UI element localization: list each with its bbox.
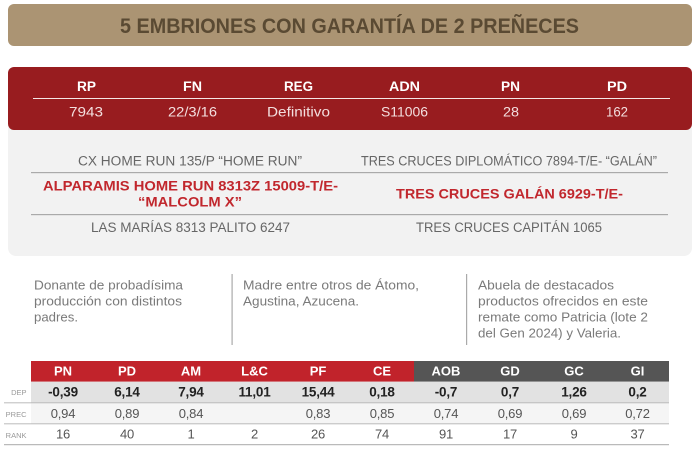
column headers: PN — [54, 364, 72, 378]
column headers — [54, 364, 644, 378]
note: grandmother — [478, 278, 648, 341]
row: PREC: 0,84 — [179, 406, 203, 421]
row: DEP: 0,7 — [501, 384, 519, 400]
title banner — [8, 4, 692, 46]
row: RANK: 26 — [311, 427, 325, 442]
row: PREC: 0,94 — [51, 406, 75, 421]
panel: animal data: ADN — [389, 79, 420, 94]
table header: red group — [31, 361, 414, 382]
row: DEP: 0,18 — [369, 384, 395, 400]
row band: DEP — [31, 382, 669, 402]
row: DEP: 11,01 — [238, 384, 271, 400]
row: RANK: 74 — [375, 427, 389, 442]
row: PREC: 0,85 — [370, 406, 394, 421]
row: RANK: 2 — [251, 427, 258, 442]
note: mother: Agustina, Azucena. — [243, 294, 359, 309]
panel: animal data: FN — [183, 79, 202, 94]
row: DEP: 6,14 — [114, 384, 140, 400]
row: RANK: 17 — [503, 427, 517, 442]
row: DEP: DEP — [11, 388, 26, 397]
row: DEP: 0,2 — [628, 384, 647, 400]
note: donor: producción con distintos — [34, 294, 183, 309]
row: RANK — [6, 427, 645, 442]
column headers: GI — [631, 364, 644, 378]
row: DEP: -0,7 — [435, 384, 457, 400]
column headers: L&C — [241, 364, 268, 378]
row: RANK: 16 — [56, 427, 70, 442]
pedigree table: TRES CRUCES DIPLOMÁTICO 7894-T/E- “GALÁN” — [361, 153, 657, 168]
pedigree table: ALPARAMIS HOME RUN 8313Z 15009-T/E- — [43, 178, 338, 194]
panel: animal data: S11006 — [381, 104, 428, 120]
panel: pedigree background — [8, 125, 692, 256]
panel: animal data: 162 — [606, 104, 628, 120]
row: RANK: 37 — [630, 427, 645, 442]
panel: animal data: 7943 — [69, 104, 103, 120]
row: PREC: 0,69 — [498, 406, 522, 421]
pedigree table: “MALCOLM X” — [138, 193, 242, 209]
panel: animal data: PN — [501, 79, 520, 94]
row: DEP — [11, 384, 647, 400]
pedigree table: CX HOME RUN 135/P “HOME RUN” — [78, 153, 302, 168]
panel: animal data: Definitivo — [267, 104, 330, 120]
column headers: PF — [310, 364, 326, 378]
note: grandmother: productos ofrecidos en este — [478, 294, 648, 309]
pedigree table: TRES CRUCES GALÁN 6929-T/E- — [396, 185, 623, 201]
title banner: 5 EMBRIONES CON GARANTÍA DE 2 PREÑECES — [120, 13, 579, 38]
panel: animal data: RP — [77, 79, 96, 94]
note: donor — [34, 278, 184, 325]
column headers: GD — [500, 364, 520, 378]
row: DEP: 7,94 — [178, 384, 204, 400]
note: grandmother: remate como Patricia (lote 2 — [478, 310, 648, 325]
pedigree table: LAS MARÍAS 8313 PALITO 6247 — [91, 220, 290, 235]
row: DEP: 1,26 — [561, 384, 587, 400]
note: donor: Donante de probadísima — [34, 278, 184, 293]
note: donor: padres. — [34, 310, 78, 325]
row: RANK: RANK — [6, 431, 26, 440]
row: RANK: 40 — [120, 427, 134, 442]
panel: animal data: PD — [607, 79, 627, 94]
column headers: AOB — [432, 364, 460, 378]
row: DEP: -0,39 — [48, 384, 78, 400]
row: RANK: 9 — [570, 427, 578, 442]
panel: animal data: 28 — [503, 104, 519, 120]
row: PREC: 0,74 — [434, 406, 458, 421]
row: PREC: 0,89 — [115, 406, 139, 421]
table header: dark group — [414, 361, 669, 382]
row: RANK: 1 — [187, 427, 195, 442]
panel: animal data: 22/3/16 — [168, 104, 217, 120]
row band: PREC — [31, 403, 669, 424]
row: DEP: 15,44 — [302, 384, 335, 400]
genetic data table — [4, 361, 669, 445]
note: grandmother: Abuela de destacados — [478, 278, 615, 293]
pedigree table: TRES CRUCES CAPITÁN 1065 — [416, 220, 602, 235]
note: mother: Madre entre otros de Átomo, — [243, 278, 419, 293]
row: PREC — [6, 406, 650, 421]
row: PREC: 0,69 — [562, 406, 586, 421]
row: PREC: PREC — [6, 410, 27, 419]
row: RANK: 91 — [439, 427, 453, 442]
row: PREC: 0,72 — [625, 406, 650, 421]
panel: animal data — [8, 67, 692, 130]
column headers: CE — [373, 364, 391, 378]
column headers: AM — [181, 364, 201, 378]
column headers: PD — [118, 364, 136, 378]
note: mother — [243, 278, 419, 309]
row: PREC: 0,83 — [306, 406, 330, 421]
panel: animal data: REG — [284, 79, 313, 94]
pedigree table — [31, 153, 668, 235]
column headers: GC — [564, 364, 584, 378]
note: grandmother: del Gen 2024) y Valeria. — [478, 326, 621, 341]
